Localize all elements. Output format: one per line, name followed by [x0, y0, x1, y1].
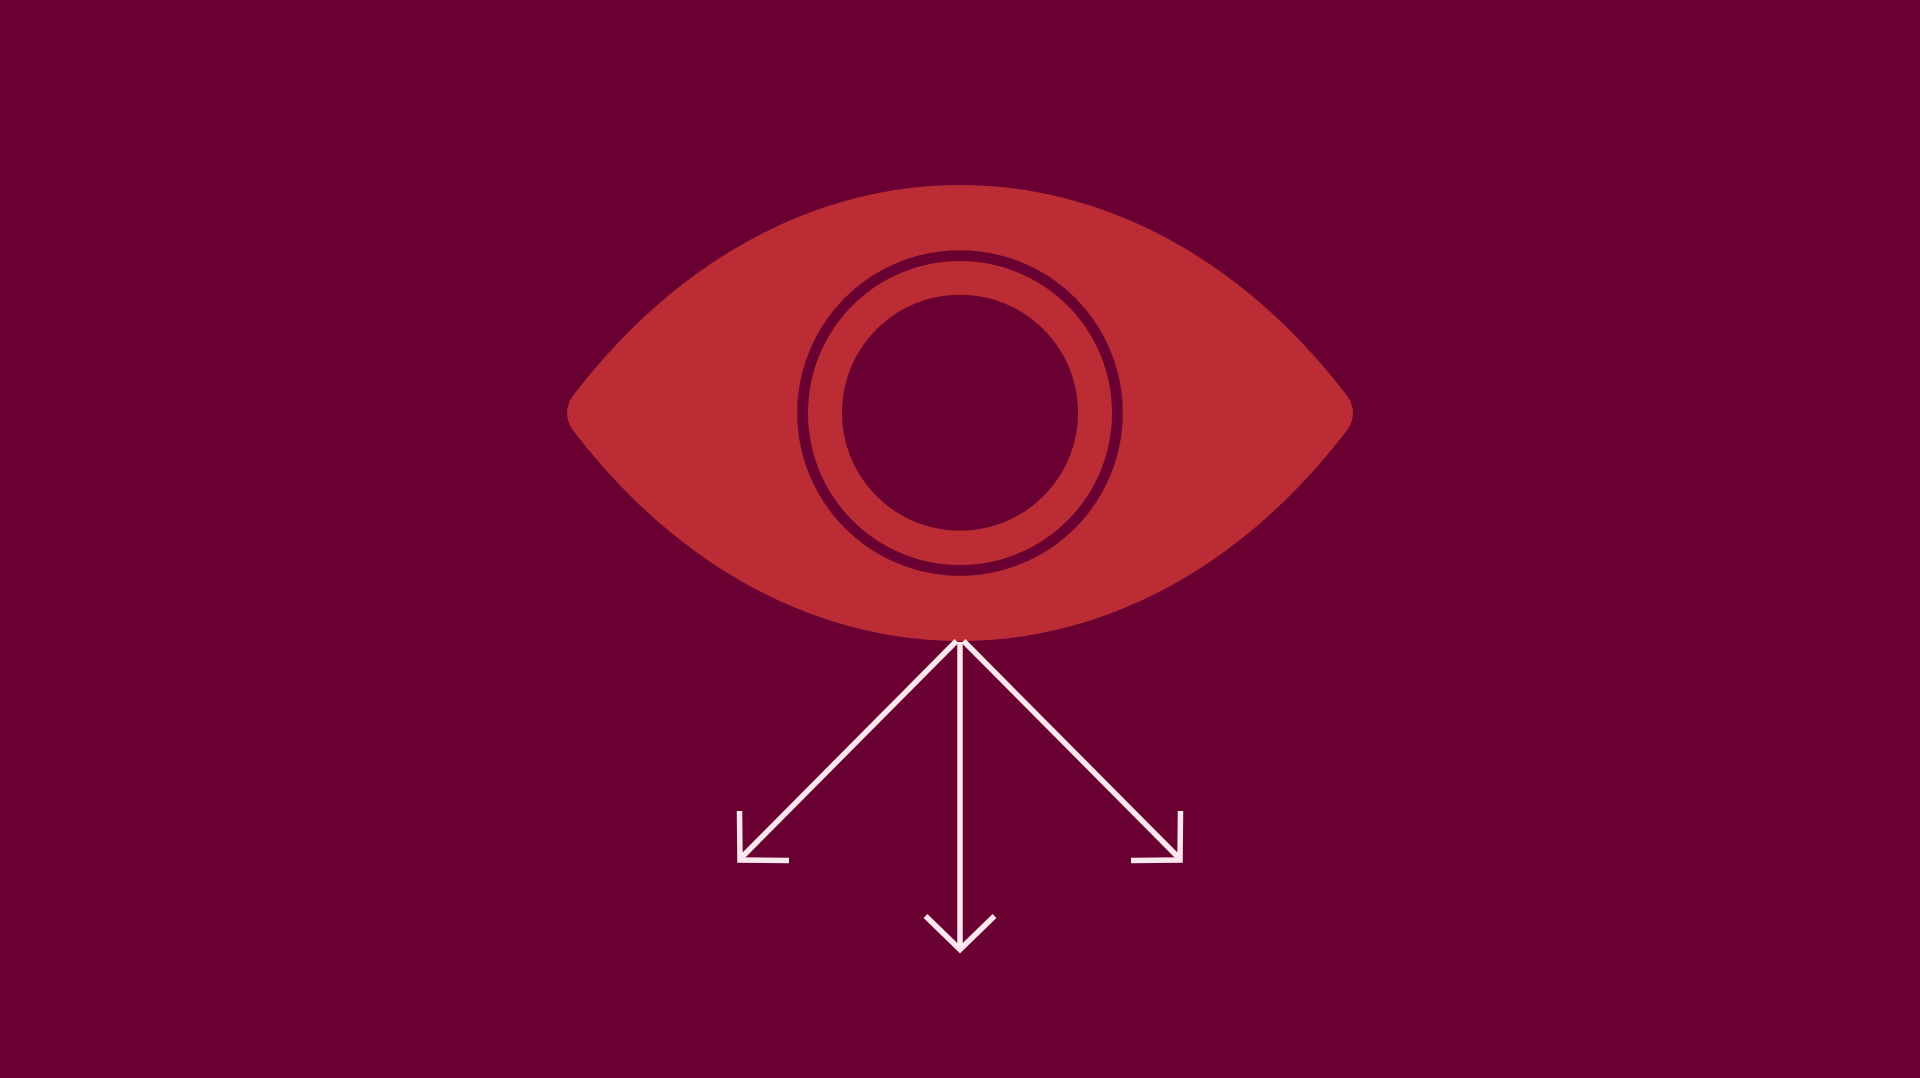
eye shape — [567, 185, 1353, 641]
arrow: down centre — [926, 642, 994, 950]
icon: eye — [567, 185, 1353, 641]
pupil — [842, 295, 1078, 531]
arrow: down right — [964, 641, 1180, 860]
iris ring — [803, 256, 1117, 570]
arrow: down left — [740, 641, 956, 860]
arrows from eye — [740, 641, 1180, 950]
